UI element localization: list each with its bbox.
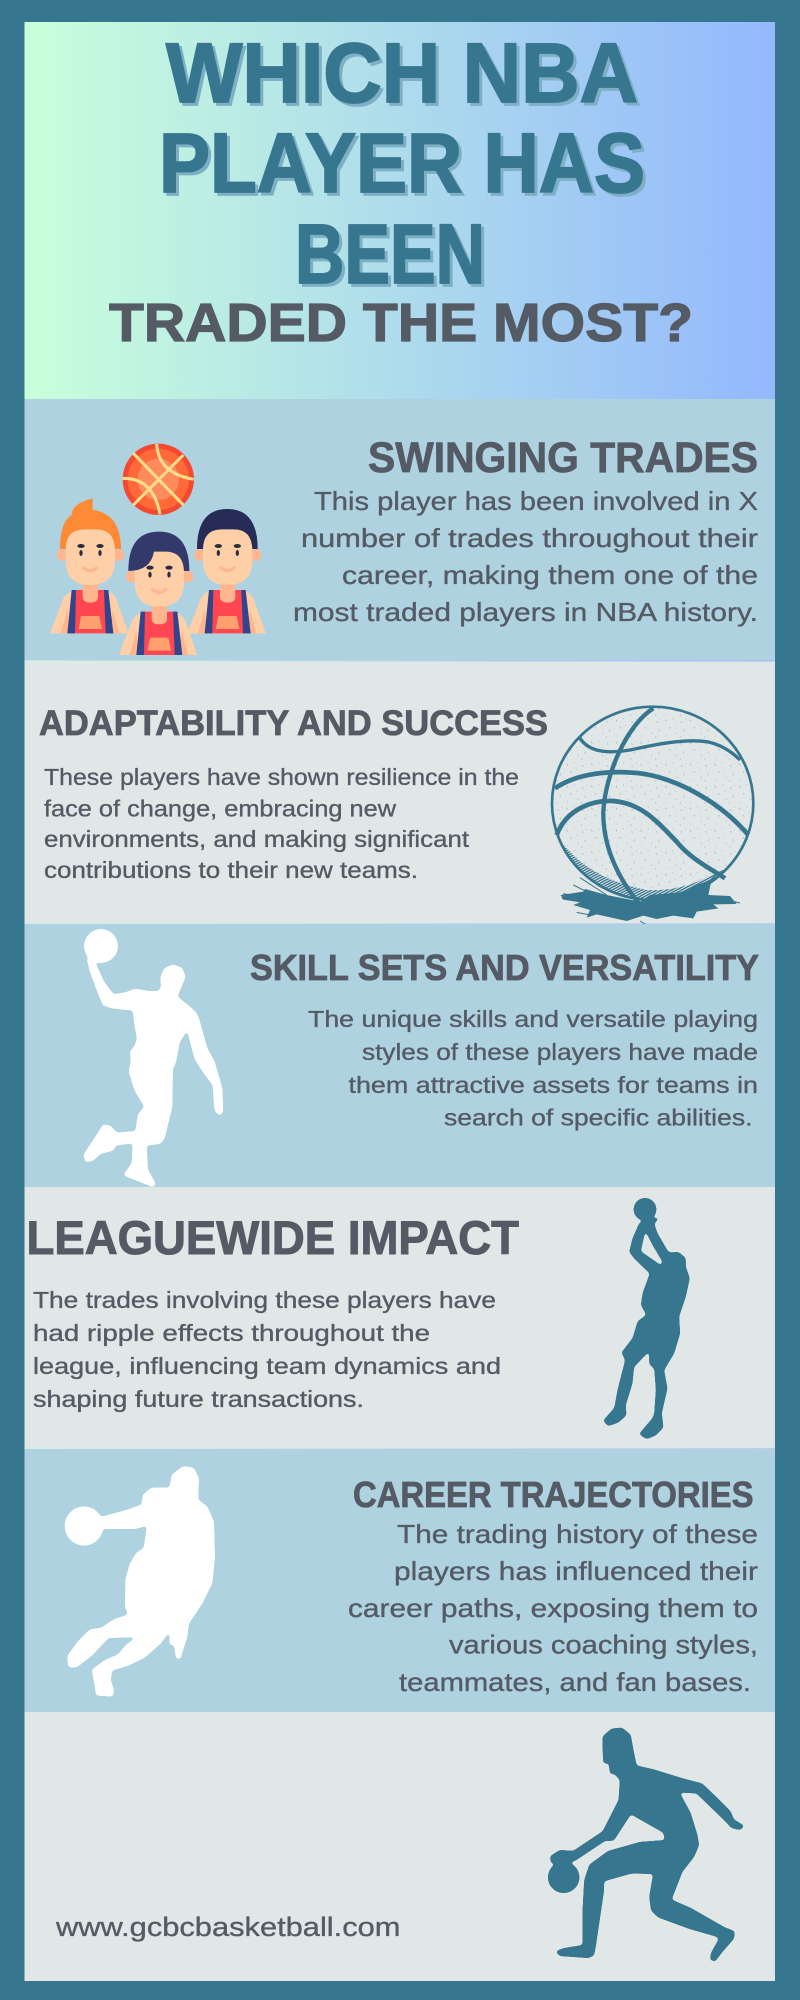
body text [308,1006,758,1130]
main title: PLAYER HAS [159,116,645,210]
icon: white dunking player silhouette [84,930,223,1187]
icon: dribbling player silhouette [549,1728,743,1961]
body text: league, influencing team dynamics and [33,1353,501,1379]
body text: search of specific abilities. [444,1104,752,1130]
heading: CAREER TRAJECTORIES [353,1474,754,1515]
body text: This player has been involved in X [314,486,758,516]
panel: adaptability and success [24,662,775,925]
body text: These players have shown resilience in the [44,764,519,790]
heading: ADAPTABILITY AND SUCCESS [39,704,548,743]
panel: career trajectories [24,1449,775,1712]
icon: jump shooter silhouette [604,1199,689,1438]
body text: most traded players in NBA history. [293,597,758,627]
panel: swinging trades [24,399,775,660]
icon: white driving player silhouette [65,1467,214,1696]
main title: WHICH NBA [166,26,638,120]
body text [348,1519,758,1697]
icon: sketched basketball [552,707,753,925]
body text: had ripple effects throughout the [33,1320,430,1346]
icon: three players and basketball [50,444,266,655]
subtitle: TRADED THE MOST? [109,293,693,353]
body text: styles of these players have made [362,1039,758,1065]
ground shadow [561,872,740,925]
panel: leaguewide impact [24,1187,775,1448]
body text: them attractive assets for teams in [348,1072,758,1098]
body text: environments, and making significant [44,826,470,852]
heading: SKILL SETS AND VERSATILITY [250,947,759,988]
body text: various coaching styles, [449,1630,758,1660]
main title: BEEN [295,207,485,301]
icon: orange basketball [123,444,194,515]
body text: career paths, exposing them to [348,1593,758,1623]
body text [293,486,758,627]
main title [159,26,645,301]
body text: The trades involving these players have [33,1287,496,1313]
body text [44,764,519,883]
body text: The trading history of these [397,1519,758,1549]
panel: skill sets and versatility [24,924,775,1187]
website url: www.gcbcbasketball.com [55,1912,401,1942]
heading: LEAGUEWIDE IMPACT [26,1211,519,1264]
body text [33,1287,501,1412]
body text: shaping future transactions. [33,1386,364,1412]
body text: face of change, embracing new [44,796,396,822]
player right [187,509,266,633]
body text: The unique skills and versatile playing [308,1006,758,1032]
body text: number of trades throughout their [301,523,758,553]
body text: contributions to their new teams. [44,857,418,883]
heading: SWINGING TRADES [368,434,758,482]
body text: career, making them one of the [342,560,758,590]
body text: teammates, and fan bases. [399,1667,751,1697]
body text: players has influenced their [394,1556,758,1586]
player centre [119,532,197,655]
panel: footer [24,1712,775,1981]
player left [50,498,128,633]
